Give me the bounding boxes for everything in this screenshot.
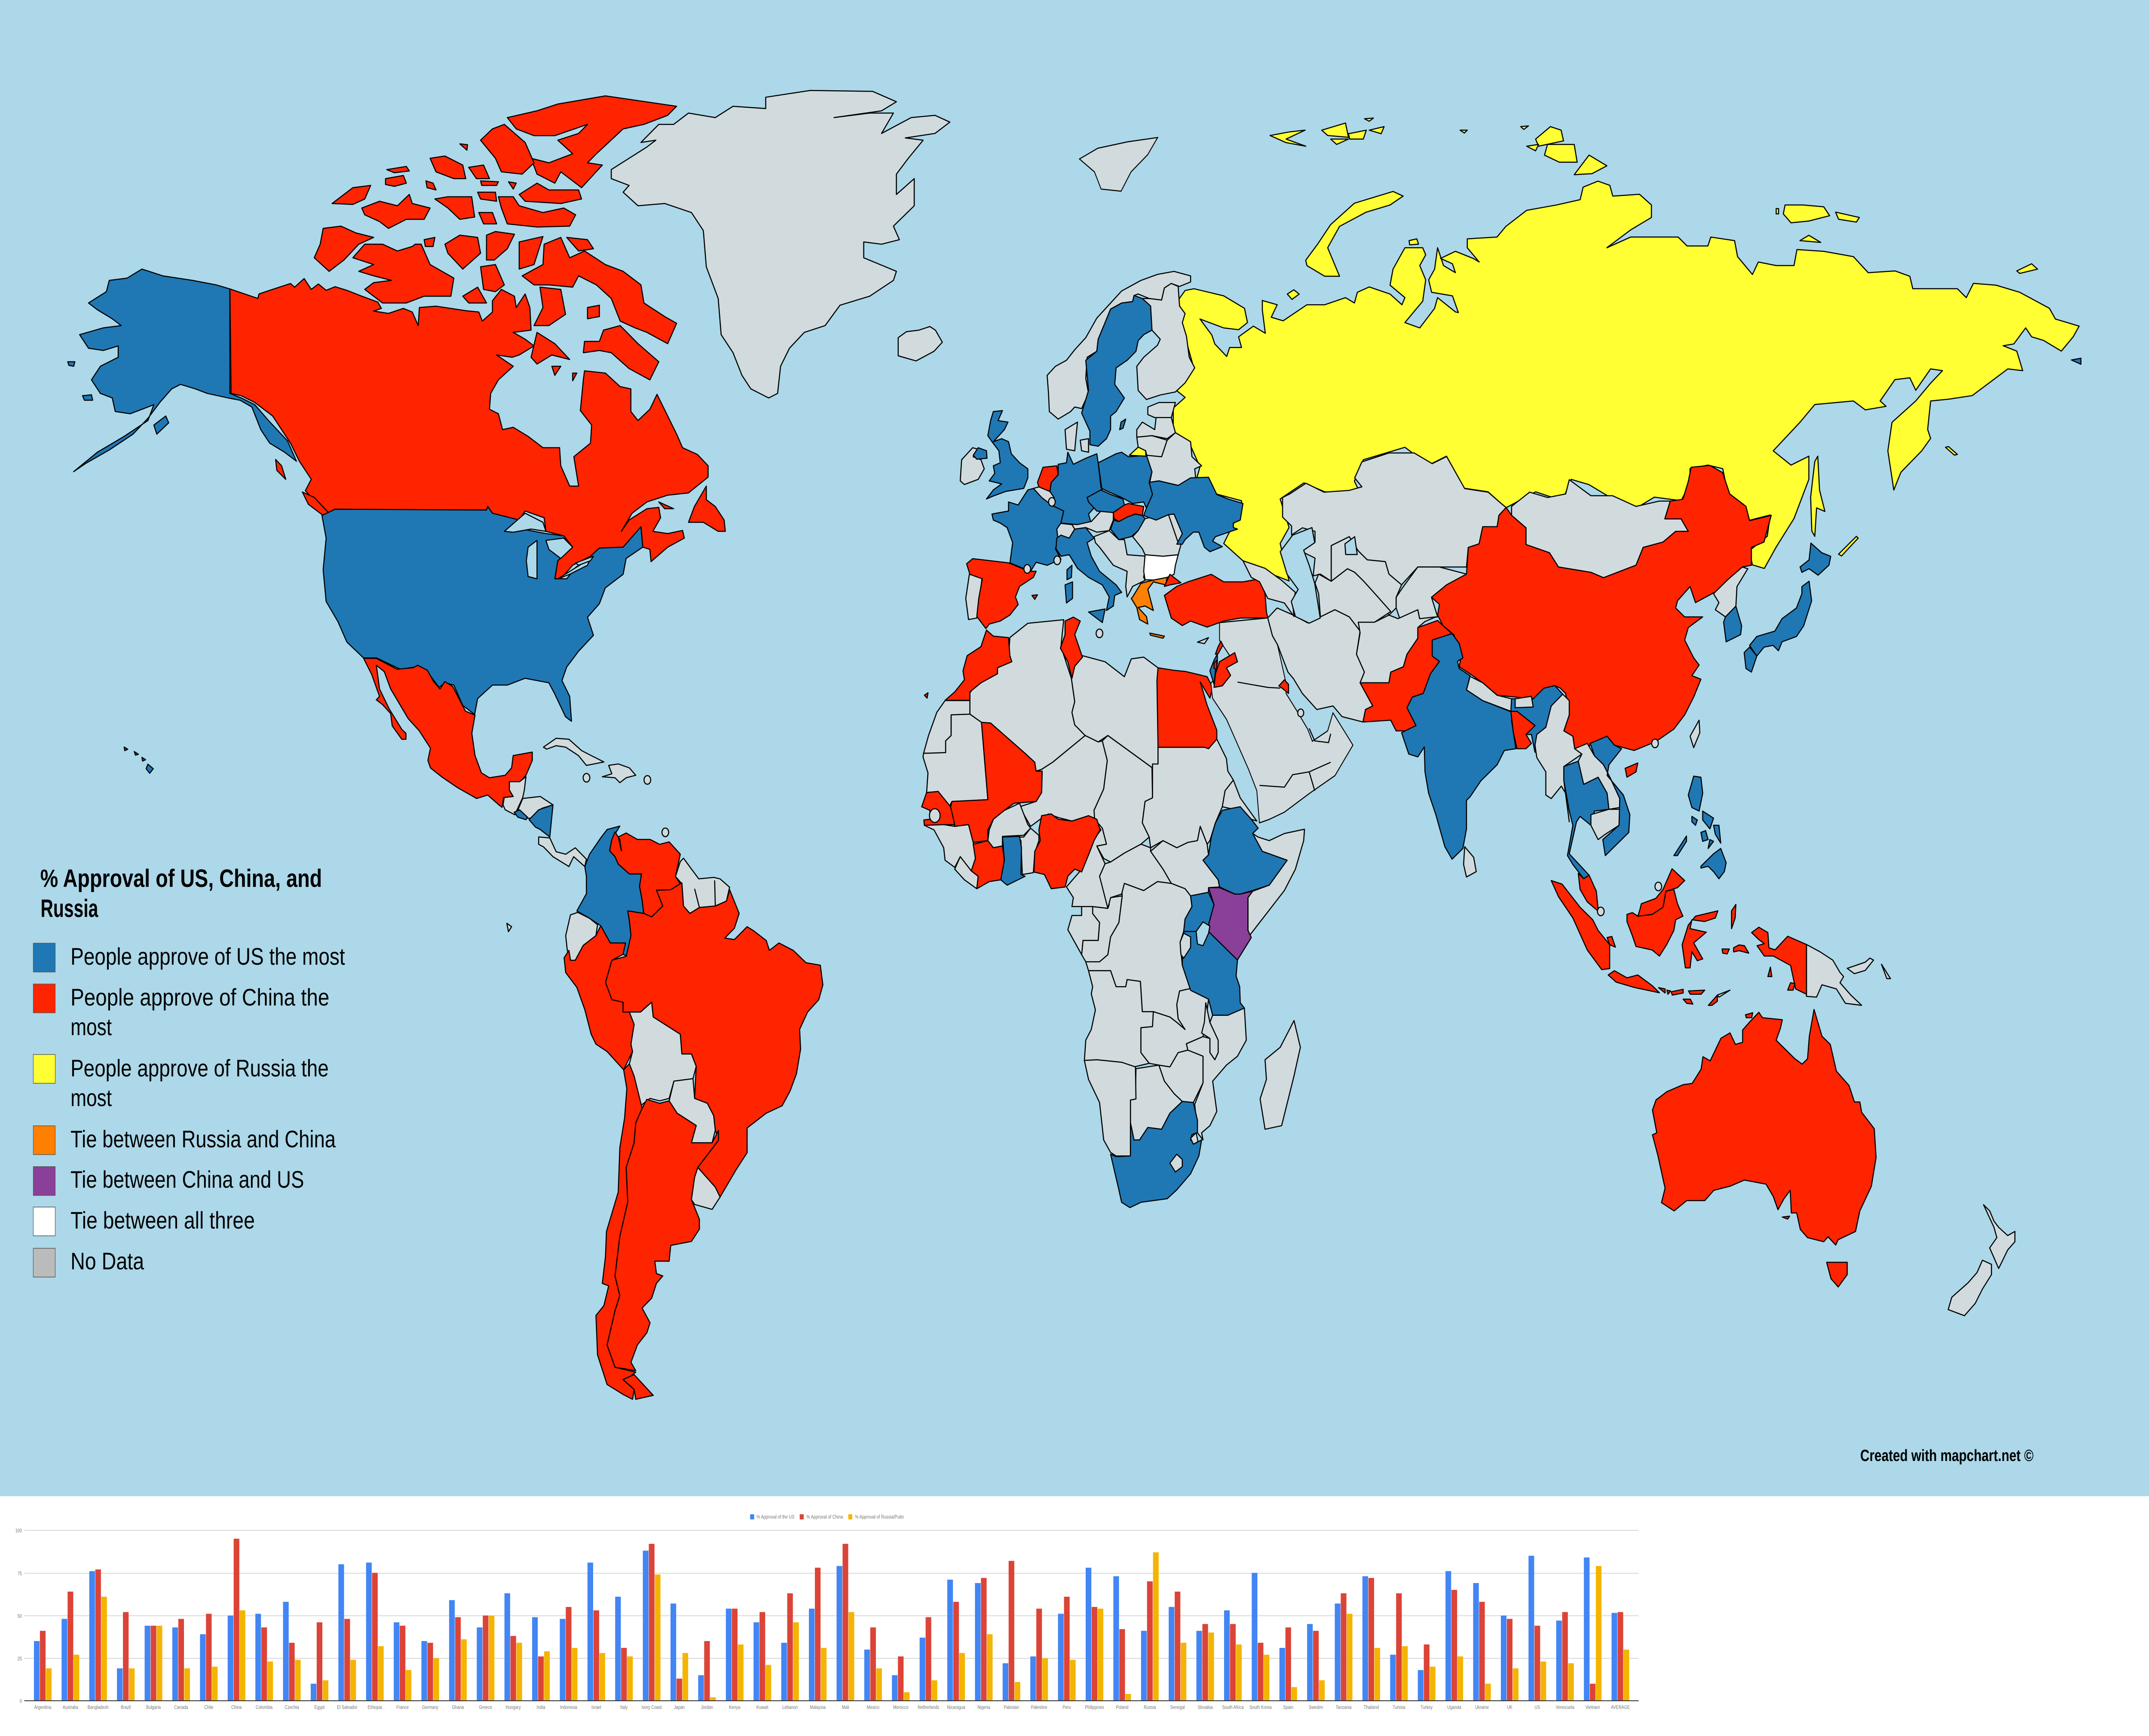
- legend item: Russia: [33, 1054, 329, 1111]
- island: Tasmania: [1827, 1262, 1847, 1287]
- country: Algeria: [970, 620, 1085, 771]
- island: Mindanao: [1701, 849, 1726, 879]
- country: Malawi: [1202, 1003, 1218, 1060]
- chart category labels: Israel: [591, 1705, 601, 1710]
- islands: Alaska: [68, 362, 169, 434]
- legend item: China: most: [70, 1014, 112, 1040]
- lake: Victoria: [1196, 922, 1210, 946]
- legend: map key: [33, 864, 345, 1277]
- country: Canada mainland: [230, 278, 708, 579]
- legend item: no data: [33, 1248, 144, 1277]
- country: Libya: [1071, 656, 1158, 767]
- country: Namibia: [1084, 1060, 1136, 1156]
- chart category labels: Japan: [674, 1705, 685, 1710]
- borders: Arabian Peninsula: [1237, 682, 1331, 791]
- country: United States: [322, 507, 643, 721]
- country: Zimbabwe: [1159, 1050, 1203, 1103]
- countries: Guatemala and Belize: [503, 777, 526, 815]
- country: Bangladesh: [1511, 711, 1535, 749]
- islands: Galapagos: [507, 923, 511, 932]
- chart category labels: Greece: [479, 1705, 492, 1710]
- legend item: Russia: People approve of Russia the: [70, 1055, 329, 1082]
- chart category labels: Germany: [422, 1705, 439, 1710]
- country: Greenland: [611, 91, 950, 398]
- chart category labels: Venezuela: [1556, 1705, 1574, 1710]
- island: Tierra del Fuego: [623, 1375, 653, 1399]
- country: Burkina Faso: [988, 803, 1031, 848]
- island: Corsica: [1067, 565, 1072, 580]
- country: Papua New Guinea: [1806, 944, 1861, 1006]
- country: Finland: [1137, 284, 1195, 400]
- country: Netherlands: [1038, 466, 1058, 492]
- chart category labels: Netherlands: [918, 1705, 939, 1710]
- country: Tunisia: [1060, 617, 1083, 679]
- map: Asia: [1268, 453, 1831, 993]
- country: Mongolia: [1512, 480, 1688, 578]
- chart bars: [34, 1539, 1629, 1701]
- country: Nigeria: [1034, 814, 1100, 889]
- island: Sicily: [1089, 609, 1105, 623]
- country: Madagascar: [1260, 1021, 1301, 1129]
- chart category labels: Spain: [1283, 1705, 1293, 1710]
- country: Thailand: [1564, 761, 1609, 879]
- country: Iceland: [898, 327, 942, 361]
- country: Senegal: [921, 792, 955, 825]
- country: Ghana: [1001, 836, 1025, 885]
- country: Mali: [951, 722, 1042, 842]
- island: Sakhalin: [1811, 456, 1825, 536]
- region: Indonesian New Guinea: [1751, 927, 1806, 994]
- chart legend: % Approval of China: [806, 1514, 843, 1520]
- map: Central and South America: [364, 658, 823, 1399]
- islands: Moluccas: [1732, 905, 1736, 929]
- legend item: China: People approve of China the: [70, 984, 329, 1011]
- country: South Sudan: [1151, 826, 1219, 896]
- countries: Caucasus: [1243, 561, 1295, 617]
- countries: Kyrgyzstan and Tajikistan: [1396, 567, 1466, 619]
- chart category labels: Tanzania: [1336, 1705, 1352, 1710]
- country: Portugal: [966, 575, 983, 620]
- country: Israel: [1210, 654, 1217, 685]
- country: Norway: [1047, 272, 1191, 419]
- country: Iran: [1268, 608, 1373, 722]
- country: Guinea: [924, 825, 975, 871]
- map: Russia and northern Asia: [1173, 118, 2081, 581]
- chart category labels: India: [537, 1705, 545, 1710]
- islands: Bangka and Belitung: [1607, 936, 1616, 947]
- state: Alaska: [73, 269, 297, 472]
- country: South Korea: [1723, 606, 1742, 642]
- country: Ecuador: [566, 912, 597, 960]
- island: Gotland: [1120, 419, 1126, 430]
- country: Slovakia: [1113, 504, 1144, 522]
- chart category labels: Tunisia: [1393, 1705, 1405, 1710]
- chart legend: [750, 1514, 904, 1520]
- country: Congo: [1082, 896, 1122, 962]
- country: Denmark: [1065, 422, 1078, 451]
- country: Bhutan: [1515, 696, 1533, 708]
- country: Tanzania: [1182, 932, 1244, 1015]
- country: Central African Republic: [1099, 844, 1171, 908]
- country: Zambia: [1141, 988, 1209, 1067]
- chart category labels: France: [396, 1705, 409, 1710]
- chart category labels: El Salvador: [337, 1705, 358, 1710]
- chart axis and gridlines: [15, 1528, 1639, 1704]
- country: Bolivia: [629, 1002, 696, 1106]
- country: Chile: [596, 1064, 642, 1399]
- country: Chad: [1094, 736, 1153, 862]
- map: Caucasus and Caspian Sea: [1243, 528, 1320, 623]
- island: Hokkaido: [1800, 543, 1831, 575]
- country: Hungary: [1111, 514, 1145, 540]
- map: Oceania: [1653, 927, 2015, 1316]
- country: Russia: [1173, 181, 2079, 581]
- countries: Guyana, Suriname, French Guiana: [676, 858, 730, 914]
- country: Australia: [1653, 1009, 1876, 1245]
- islands: Balearic: [1032, 595, 1038, 599]
- chart category labels: Italy: [620, 1705, 628, 1710]
- islands: Visayas and Palawan: [1674, 811, 1721, 856]
- island: New Zealand North: [1984, 1205, 2015, 1268]
- lakes: Great Lakes: [504, 513, 594, 579]
- country: Kuwait: [1279, 680, 1289, 694]
- chart category labels: Malaysia: [810, 1705, 826, 1710]
- country: Great Britain: [986, 411, 1028, 499]
- country: Gabon: [1068, 907, 1099, 955]
- chart category labels: Ivory Coast: [642, 1705, 662, 1710]
- chart category labels: Slovakia: [1198, 1705, 1213, 1710]
- country: Uganda: [1184, 892, 1214, 932]
- chart axis and gridlines: 25: [18, 1656, 22, 1662]
- country: Bulgaria: [1144, 555, 1178, 581]
- country: Switzerland: [1053, 523, 1075, 538]
- country: Malaysia, peninsula: [1578, 874, 1600, 913]
- country: India: [1402, 634, 1563, 859]
- chart category labels: Czechia: [285, 1705, 299, 1710]
- country: Laos: [1575, 743, 1620, 809]
- country: Jordan: [1214, 653, 1237, 688]
- legend item: three way tie: Tie between all three: [70, 1207, 255, 1234]
- country: Paraguay: [669, 1079, 715, 1143]
- countries: Costa Rica and Panama: [539, 837, 586, 867]
- credit: Created with mapchart.net ©: [1860, 1446, 2033, 1465]
- country: Honduras: [518, 797, 553, 818]
- island: New Britain: [1847, 958, 1873, 974]
- country: Benin and Togo: [1018, 828, 1039, 874]
- chart category labels: Ukraine: [1475, 1705, 1489, 1710]
- island: Crete: [1150, 633, 1164, 638]
- bar chart: approval by country: [15, 1514, 1639, 1710]
- country: Romania: [1133, 514, 1182, 556]
- country: Turkey: [1164, 575, 1268, 627]
- legend item: China: [33, 984, 329, 1040]
- country: Uzbekistan: [1331, 537, 1402, 615]
- chart axis and gridlines: 75: [18, 1571, 22, 1577]
- island: Bougainville: [1882, 964, 1891, 978]
- country: China: [1432, 465, 1771, 752]
- legend title: % Approval of US, China, and: [40, 864, 322, 892]
- country: Lesotho: [1170, 1154, 1182, 1172]
- chart category labels: AVERAGE: [1611, 1705, 1630, 1710]
- chart category labels: South Korea: [1249, 1705, 1272, 1710]
- chart axis and gridlines: 50: [18, 1614, 22, 1619]
- country: Italy: [1056, 528, 1122, 611]
- country: Angola: [1084, 971, 1153, 1067]
- island: Sulawesi: [1682, 911, 1718, 968]
- country: Rwanda and Burundi: [1180, 933, 1191, 958]
- chart category labels: [34, 1705, 1630, 1710]
- island: East Timor: [1717, 990, 1730, 997]
- country: Pakistan: [1360, 620, 1452, 731]
- country: Argentina: [607, 1099, 719, 1371]
- country: Mauritania: [923, 714, 988, 807]
- map: Canada, Alaska and Greenland: [68, 91, 950, 773]
- country: Mozambique: [1186, 1008, 1246, 1140]
- country: Ireland: [960, 448, 984, 485]
- chart category labels: Egypt: [315, 1705, 324, 1710]
- chart category labels: Sweden: [1309, 1705, 1323, 1710]
- country: Taiwan: [1690, 720, 1700, 748]
- chart category labels: Morocco: [893, 1705, 909, 1710]
- country: Czechia: [1087, 490, 1124, 513]
- legend item: no data: No Data: [70, 1248, 144, 1274]
- chart category labels: Bulgaria: [146, 1705, 161, 1710]
- country: Venezuela: [609, 832, 680, 917]
- islands: Canadian Arctic Archipelago: [276, 96, 726, 532]
- chart category labels: China: [231, 1705, 242, 1710]
- chart category labels: Uganda: [1447, 1705, 1461, 1710]
- country: Kenya: [1209, 888, 1252, 960]
- chart category labels: Brazil: [121, 1705, 131, 1710]
- islands: Russian Arctic: [1270, 118, 2038, 556]
- country: Kazakhstan: [1283, 453, 1506, 585]
- country: Uruguay: [692, 1168, 720, 1209]
- country: Spain: [967, 559, 1036, 629]
- island: Cuba: [543, 738, 604, 765]
- island: Aleutians: [2071, 358, 2081, 364]
- legend item: Russia: most: [70, 1085, 112, 1111]
- country: Lebanon: [1215, 641, 1223, 654]
- country: Egypt: [1157, 668, 1217, 749]
- country: Moldova: [1169, 514, 1182, 543]
- chart category labels: Australia: [63, 1705, 78, 1710]
- chart category labels: Indonesia: [560, 1705, 577, 1710]
- chart category labels: Canada: [174, 1705, 188, 1710]
- country: Eritrea: [1222, 780, 1257, 821]
- legend item: US: People approve of US the most: [70, 943, 345, 970]
- country: Sweden: [1082, 296, 1152, 446]
- chart category labels: Ethiopia: [367, 1705, 382, 1710]
- country: Lithuania: [1137, 436, 1167, 460]
- country: El Salvador: [514, 810, 527, 820]
- islands: Hawaii: [124, 747, 153, 773]
- chart legend: % Approval of the US: [756, 1514, 794, 1520]
- chart category labels: Turkey: [1420, 1705, 1433, 1710]
- chart category labels: Bangladesh: [88, 1705, 109, 1710]
- country: Brazil: [606, 883, 823, 1197]
- country: Sri Lanka: [1463, 847, 1476, 877]
- country: Afghanistan: [1356, 610, 1436, 683]
- chart category labels: Poland: [1116, 1705, 1128, 1710]
- country: Germany: [1050, 452, 1102, 525]
- chart axis and gridlines: 0: [20, 1699, 22, 1704]
- island: Hispaniola: [602, 764, 636, 782]
- chart category labels: Pakistan: [1004, 1705, 1019, 1710]
- map: Arabian Peninsula and Levant: [1211, 618, 1353, 823]
- country: Colombia: [577, 826, 644, 957]
- map: Africa: [921, 620, 1304, 1207]
- chart category labels: US: [1534, 1705, 1540, 1710]
- country: Ivory Coast: [971, 840, 1004, 889]
- chart legend: % Approval of Russia/Putin: [855, 1514, 904, 1520]
- chart category labels: Kenya: [729, 1705, 741, 1710]
- country: Belgium: [1033, 487, 1054, 505]
- country: Mexico: [364, 658, 532, 807]
- country: Poland: [1098, 452, 1153, 508]
- country: Belarus: [1146, 433, 1202, 486]
- chart category labels: Palestine: [1031, 1705, 1047, 1710]
- country: Ethiopia: [1203, 807, 1287, 894]
- island: Borneo, Indonesia: [1627, 889, 1683, 956]
- chart category labels: Russia: [1144, 1705, 1156, 1710]
- island: Sumatra: [1551, 880, 1610, 969]
- chart category labels: Mali: [842, 1705, 849, 1710]
- country: Botswana: [1130, 1065, 1182, 1140]
- chart category labels: Nigeria: [977, 1705, 990, 1710]
- legend item: China and US tie: Tie between China and US: [70, 1166, 304, 1193]
- islands: Lesser Sunda and Moluccas: [1659, 945, 1795, 1219]
- region: Turkey, Thrace: [1164, 575, 1181, 587]
- island: Cyprus: [1197, 638, 1209, 644]
- country: Northern Ireland: [973, 448, 987, 459]
- chart category labels: South Africa: [1222, 1705, 1244, 1710]
- chart category labels: Mexico: [867, 1705, 879, 1710]
- country: Eswatini: [1191, 1133, 1198, 1144]
- chart category labels: Colombia: [256, 1705, 272, 1710]
- country: North Korea: [1714, 567, 1748, 617]
- island: Kyushu: [1744, 647, 1757, 672]
- country: Nicaragua: [529, 805, 553, 837]
- country: Denmark islands: [1080, 439, 1089, 452]
- territory: Palestine: [1214, 660, 1217, 669]
- chart category labels: Ghana: [452, 1705, 464, 1710]
- country: Austria: [1072, 511, 1113, 532]
- territory: Kaliningrad: [1130, 447, 1146, 456]
- chart category labels: Thailand: [1364, 1705, 1379, 1710]
- country: Estonia: [1148, 403, 1176, 418]
- country: Cameroon: [1066, 819, 1109, 908]
- map: Svalbard: [1080, 138, 1157, 191]
- country: South Africa: [1111, 1101, 1202, 1207]
- island: Java: [1608, 971, 1659, 993]
- country: Liberia: [955, 857, 978, 889]
- chart category labels: Vietnam: [1586, 1705, 1600, 1710]
- chart category labels: Argentina: [34, 1705, 51, 1710]
- country: Ukraine: [1144, 477, 1243, 552]
- chart category labels: Chile: [204, 1705, 213, 1710]
- map: Europe, North Africa coast and Levant: [898, 272, 1289, 700]
- island: Sardinia: [1065, 582, 1072, 603]
- chart category labels: Philippines: [1085, 1705, 1104, 1710]
- country: Nepal: [1466, 676, 1512, 711]
- country: Morocco: [945, 630, 1012, 700]
- country: Somalia: [1248, 829, 1304, 938]
- chart category labels: Lebanon: [782, 1705, 798, 1710]
- chart category labels: Kuwait: [756, 1705, 768, 1710]
- island: Luzon: [1688, 776, 1703, 811]
- chart category labels: Peru: [1062, 1705, 1071, 1710]
- chart category labels: Hungary: [506, 1705, 521, 1710]
- lake: Aral Sea: [1345, 537, 1357, 554]
- chart category labels: Jordan: [701, 1705, 713, 1710]
- chart category labels: Senegal: [1170, 1705, 1185, 1710]
- country: Western Sahara: [924, 700, 970, 753]
- country: Cambodia: [1591, 809, 1620, 840]
- country: Sudan: [1142, 739, 1234, 848]
- country: Turkmenistan: [1315, 569, 1391, 635]
- country: France: [992, 489, 1064, 572]
- country: Greece: [1131, 578, 1167, 624]
- island: Hainan: [1625, 763, 1638, 777]
- country: DR Congo: [1086, 882, 1192, 1030]
- islands: Canaries: [924, 693, 928, 698]
- country: Myanmar: [1535, 694, 1582, 822]
- chart axis and gridlines: 100: [15, 1528, 22, 1534]
- island: New Zealand South: [1948, 1260, 1991, 1316]
- sea: Caspian: [1280, 528, 1320, 623]
- chart category labels: UK: [1507, 1705, 1513, 1710]
- country: Peru: [564, 926, 634, 1070]
- country: Niger: [1019, 736, 1107, 826]
- island: Borneo, Malaysia: [1638, 869, 1685, 916]
- markers: small territories: [583, 498, 1662, 916]
- chart category labels: Nicaragua: [947, 1705, 965, 1710]
- country: Latvia: [1137, 418, 1176, 439]
- legend item: Russia and China tie: Tie between Russia and China: [70, 1126, 336, 1152]
- country: Vietnam: [1590, 736, 1630, 856]
- legend title: Russia: [40, 894, 98, 922]
- island: Honshu: [1750, 581, 1812, 656]
- countries: Western Balkans: [1094, 531, 1146, 597]
